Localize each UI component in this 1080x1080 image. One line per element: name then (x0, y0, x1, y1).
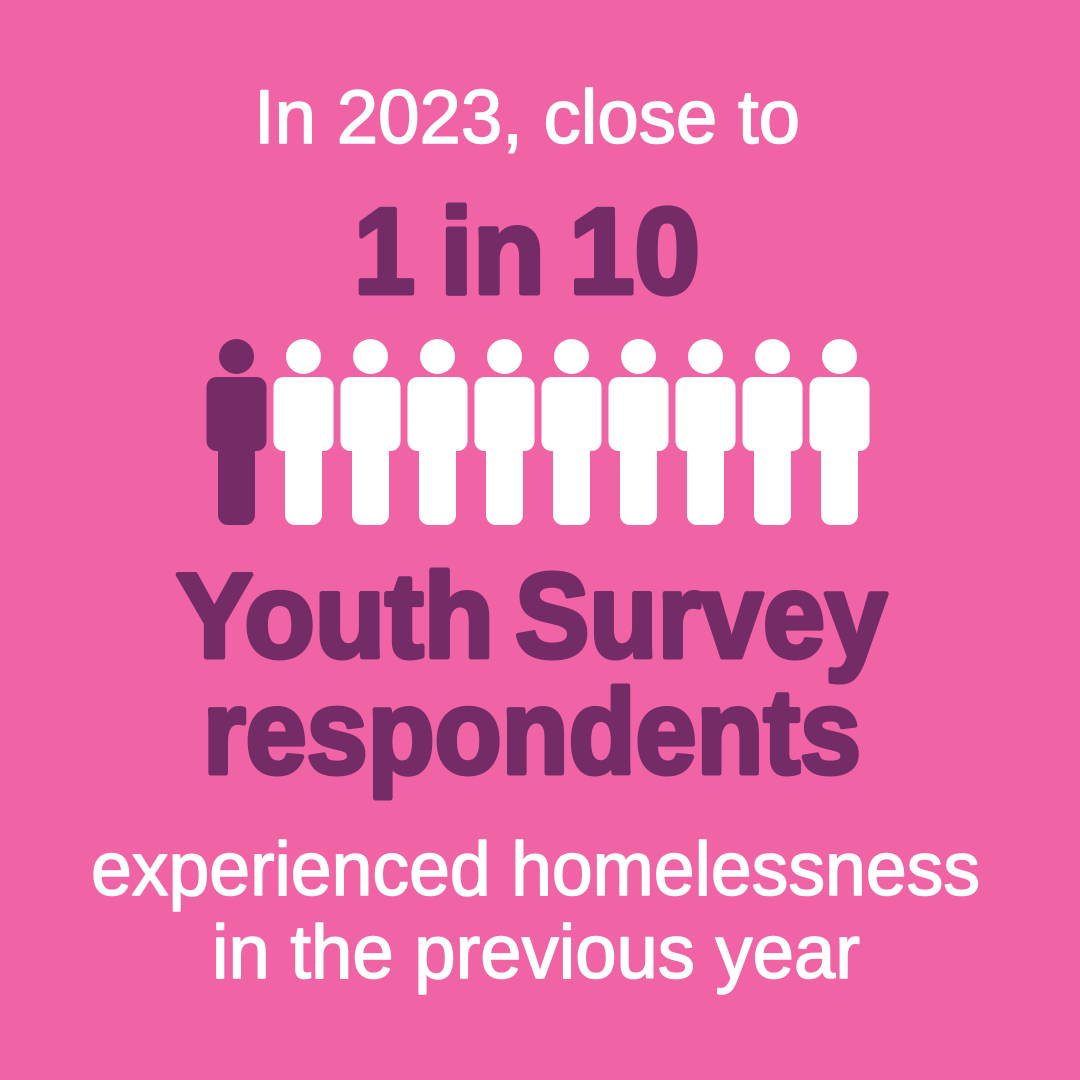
headline statistic: 1 (354, 183, 415, 319)
icon: highlighted person (206, 339, 266, 525)
headline statistic: in (440, 183, 545, 319)
icon: person 8 (676, 339, 736, 525)
icon: person 9 (742, 339, 802, 525)
icon: person 5 (474, 339, 534, 525)
icon: person 3 (340, 339, 400, 525)
icon: person 6 (542, 339, 602, 525)
heading: Youth Survey: Survey (515, 549, 887, 683)
heading: intro line: In 2023, close to (254, 75, 800, 160)
icon: person 2 (274, 339, 334, 525)
heading: Youth Survey: Youth (176, 549, 494, 683)
headline statistic: 10 (569, 183, 700, 319)
icon: person 10 (810, 339, 870, 525)
heading: Youth Survey (176, 549, 887, 683)
text block: closing line two: in the previous year (212, 910, 860, 995)
heading: respondents: respondents (203, 665, 861, 799)
icon: person 7 (608, 339, 668, 525)
icon row: ten people, one highlighted (206, 339, 870, 525)
headline statistic (354, 183, 700, 319)
icon: person 4 (408, 339, 468, 525)
text block: closing line one: experienced homelessness (91, 827, 980, 912)
